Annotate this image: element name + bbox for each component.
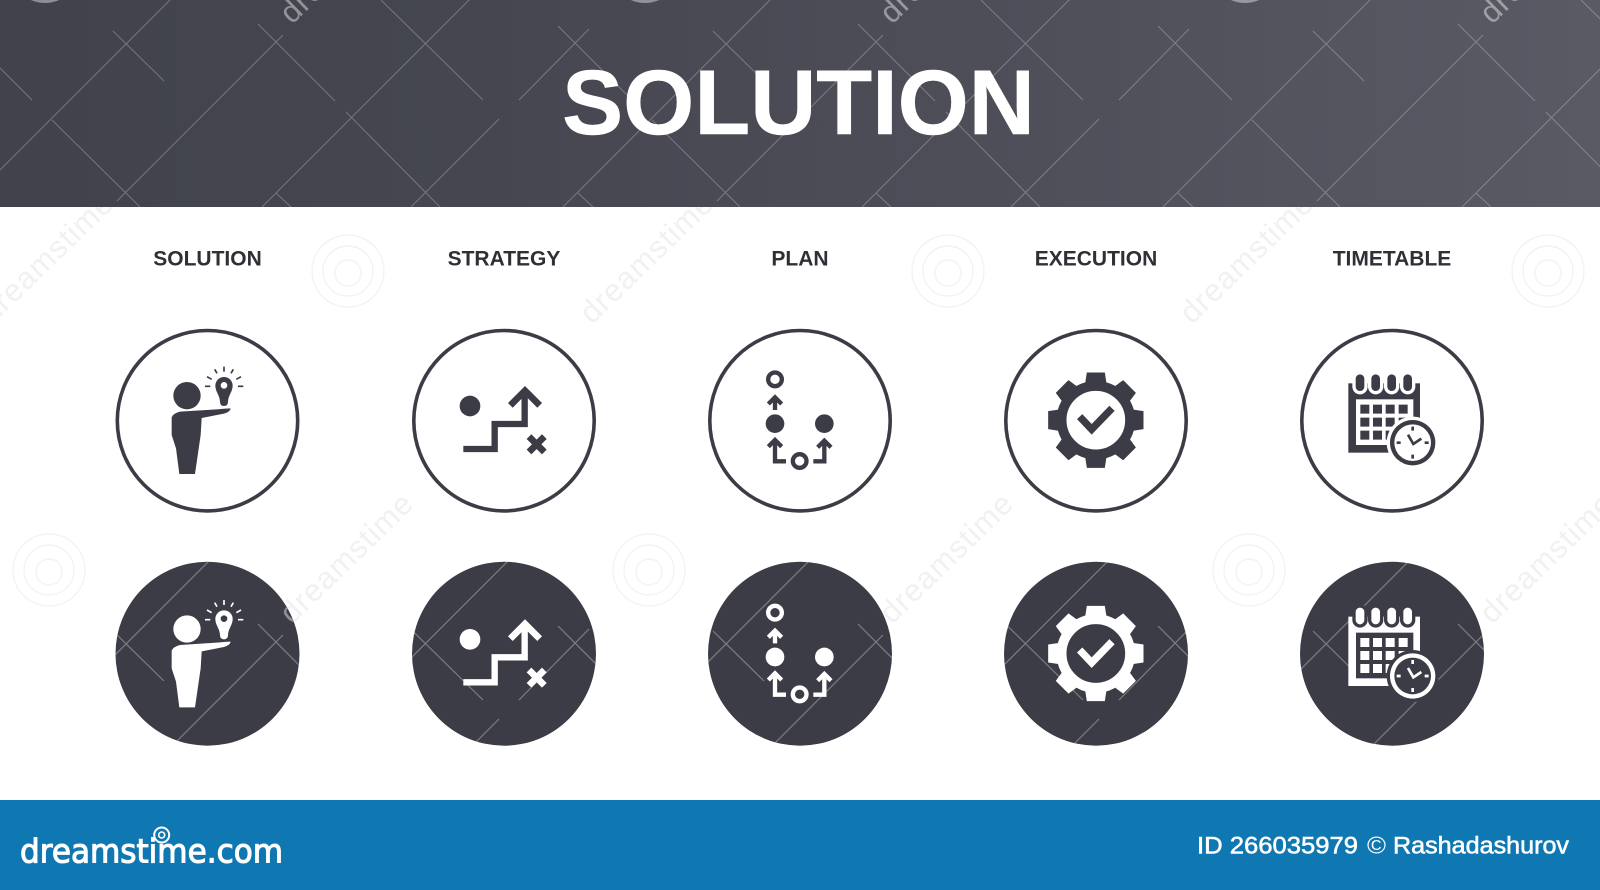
footer credit: © <box>1367 832 1386 860</box>
outlined icon row <box>117 330 1482 511</box>
icon: solution filled <box>172 600 243 707</box>
text: dreamstime <box>1173 185 1321 330</box>
label: execution: EXECUTION <box>1035 248 1157 270</box>
icon: execution outlined <box>1006 330 1186 511</box>
footer logo: dreamstime.com <box>20 832 283 870</box>
icon: strategy outlined <box>414 330 594 511</box>
icon: timetable filled <box>1348 606 1439 702</box>
icon: plan filled <box>766 606 834 701</box>
text: dreamstime <box>873 485 1021 630</box>
label: timetable: TIMETABLE <box>1333 248 1451 270</box>
label: solution: SOLUTION <box>153 248 262 270</box>
text: dreamstime <box>273 485 421 630</box>
icon: strategy filled <box>460 624 544 685</box>
column labels <box>153 248 1451 270</box>
icon: execution filled <box>1048 606 1143 701</box>
title: SOLUTION <box>562 52 1035 154</box>
filled icon row: dreamstime <box>273 485 421 630</box>
footer credit <box>1197 832 1569 860</box>
footer credit: Rashadashurov <box>1393 832 1569 860</box>
filled icon row <box>116 562 1484 746</box>
icon: solution outlined <box>117 330 298 511</box>
header banner <box>0 0 1600 207</box>
icon: plan outlined <box>710 330 890 511</box>
text: dreamstime <box>573 185 721 330</box>
footer bar <box>0 800 1600 890</box>
label: strategy: STRATEGY <box>448 248 560 270</box>
label: plan: PLAN <box>771 248 829 270</box>
footer credit: ID 266035979 <box>1197 832 1358 860</box>
icon: timetable outlined <box>1302 330 1482 511</box>
